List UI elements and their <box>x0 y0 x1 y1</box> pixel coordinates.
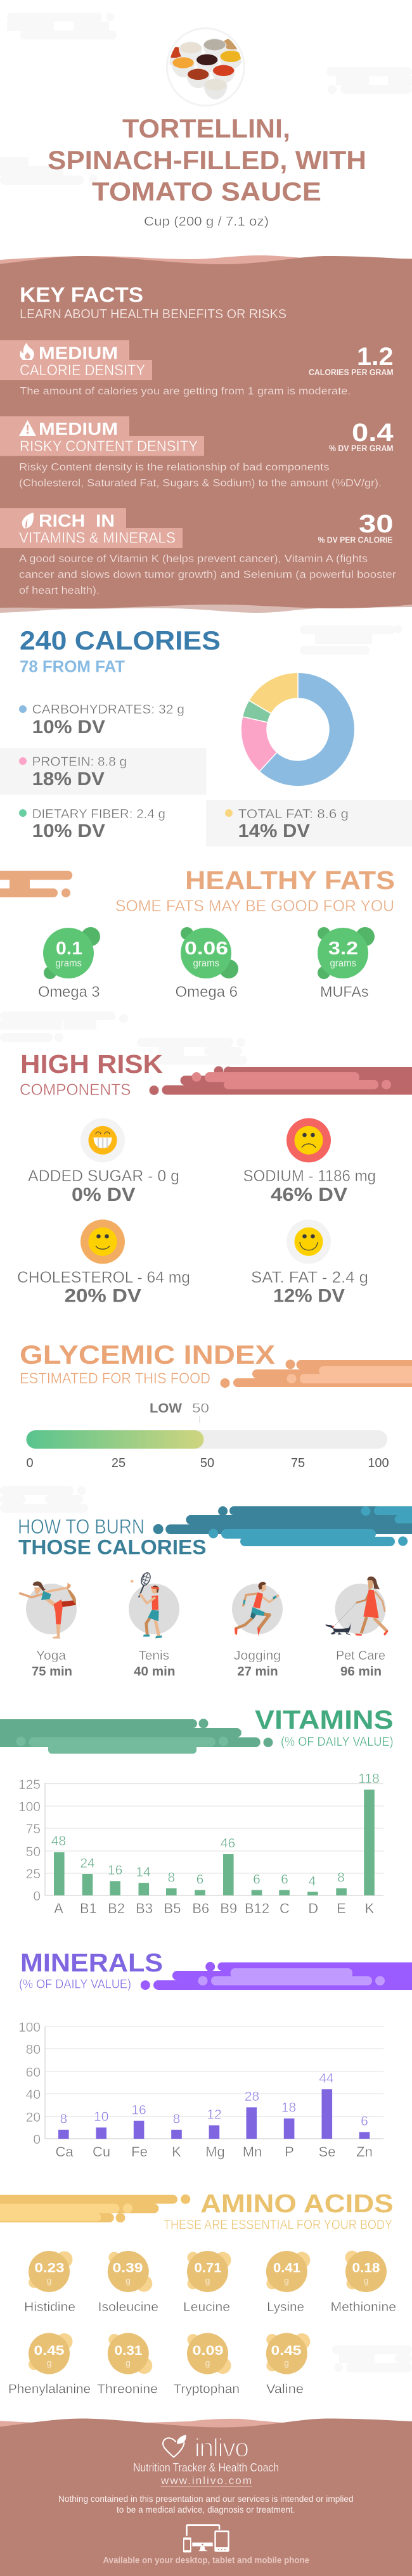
panel: amino acids <box>0 2189 396 2397</box>
unit: % DV PER GRAM <box>329 444 394 453</box>
axis labels: 0 <box>33 1889 41 1904</box>
badge: omega 3: Omega 3 <box>38 984 100 1001</box>
badge: methionine <box>331 2251 396 2314</box>
panel: high risk components <box>17 1049 412 1307</box>
icon: flame <box>20 343 34 360</box>
title <box>48 113 366 207</box>
description <box>19 461 382 489</box>
value labels: 44 <box>319 2071 334 2086</box>
category labels: B5 <box>164 1900 181 1916</box>
donut chart <box>241 672 355 786</box>
value labels <box>60 2071 368 2129</box>
decorative bar <box>141 1962 412 1990</box>
fact: calorie density <box>0 340 394 397</box>
item: added sugar: 0% DV <box>72 1184 136 1205</box>
value labels: 12 <box>207 2108 222 2122</box>
heading: AMINO ACIDS <box>200 2189 394 2218</box>
legend: dietary fiber <box>19 807 165 842</box>
category labels: B2 <box>108 1900 125 1916</box>
badge: mufas: grams <box>330 958 356 969</box>
activity: tennis <box>129 1572 179 1679</box>
reading: low 50: 50 <box>192 1401 209 1416</box>
fact: risky content density <box>0 416 394 489</box>
badge: phenylalanine <box>8 2333 91 2397</box>
heading: MINERALS <box>20 1948 163 1977</box>
badge: tryptophan: Tryptophan <box>174 2383 240 2397</box>
scale labels: 50 <box>200 1456 214 1470</box>
legend: carbohydrates <box>19 703 184 738</box>
axis labels: 125 <box>18 1778 41 1792</box>
axis labels: 50 <box>26 1845 41 1859</box>
duration: 40 min <box>134 1665 175 1679</box>
badge: histidine <box>24 2251 75 2314</box>
figure: tennis player <box>131 1572 162 1638</box>
badge: isoleucine: Isoleucine <box>98 2300 158 2314</box>
legend: total fat: 14% DV <box>238 821 310 842</box>
heading: HIGH RISK <box>20 1049 163 1079</box>
badge: threonine: Threonine <box>97 2383 158 2397</box>
item: cholesterol: 20% DV <box>65 1286 141 1307</box>
icon: heart with leaf <box>163 2435 186 2457</box>
item: saturated fat: SAT. FAT - 2.4 g <box>251 1269 368 1286</box>
background: protein row <box>0 748 207 795</box>
value labels: 28 <box>245 2089 259 2104</box>
heading <box>18 1515 207 1559</box>
value labels: 8 <box>173 2111 180 2127</box>
bar chart: vitamins <box>18 1772 383 1916</box>
unit: % DV PER CALORIE <box>318 535 392 545</box>
category labels: Se <box>319 2144 335 2160</box>
axis labels <box>18 2020 41 2147</box>
category labels: A <box>54 1900 63 1916</box>
description: The amount of calories you are getting from 1 gram is moderate. <box>20 385 351 397</box>
badge: lysine: Lysine <box>267 2300 304 2314</box>
value labels: 8 <box>167 1871 175 1885</box>
category labels: B6 <box>192 1900 209 1916</box>
description: Risky Content density is the relationship of bad components <box>19 461 330 473</box>
subheading: from fat: 78 FROM FAT <box>20 657 125 676</box>
website: www.inlivo.com <box>160 2475 252 2487</box>
axis labels: 80 <box>26 2042 41 2057</box>
description: (Cholesterol, Saturated Fat, Sugars & Sodium) to the amount (%DV/gr). <box>19 477 382 489</box>
badge: histidine: g <box>47 2276 51 2286</box>
label: RISKY CONTENT DENSITY <box>20 438 198 455</box>
title: TORTELLINI, <box>122 113 290 143</box>
subheading: COMPONENTS <box>20 1081 131 1099</box>
item: added sugar <box>28 1118 179 1205</box>
figure: woman walking dog <box>325 1577 389 1636</box>
scale labels: 25 <box>112 1456 126 1470</box>
duration: 75 min <box>32 1665 72 1679</box>
item: saturated fat <box>251 1219 368 1307</box>
label: Tenis <box>138 1649 169 1663</box>
scale labels <box>26 1456 389 1470</box>
legend: dietary fiber: 10% DV <box>32 821 105 842</box>
subheading: SOME FATS MAY BE GOOD FOR YOU <box>115 897 394 915</box>
value: 1.2 <box>357 343 394 371</box>
category labels: Zn <box>356 2144 373 2160</box>
badge: methionine: 0.18 <box>352 2261 380 2276</box>
item: saturated fat: 12% DV <box>273 1286 345 1307</box>
value labels: 48 <box>51 1834 66 1849</box>
background: total fat row <box>206 800 412 847</box>
badge: omega 6: 0.06 <box>184 939 228 959</box>
badge: lysine: g <box>284 2276 289 2286</box>
value labels: 24 <box>80 1856 95 1871</box>
category labels: B3 <box>136 1900 153 1916</box>
category labels: Mn <box>243 2144 262 2160</box>
axis labels: 20 <box>26 2110 41 2125</box>
badge: leucine: g <box>205 2276 210 2286</box>
value labels: 10 <box>94 2110 108 2124</box>
heading: GLYCEMIC INDEX <box>20 1340 275 1369</box>
badge: leucine: 0.71 <box>194 2261 222 2276</box>
panel: footer <box>0 2418 412 2576</box>
legend: protein: 18% DV <box>32 769 105 790</box>
badge: isoleucine: 0.39 <box>113 2261 143 2276</box>
badge: leucine: Leucine <box>183 2300 230 2314</box>
category labels: B12 <box>245 1900 269 1916</box>
description <box>19 553 396 596</box>
legend: carbohydrates: 10% DV <box>32 717 105 738</box>
heading: HEALTHY FATS <box>185 866 395 895</box>
item: cholesterol: CHOLESTEROL - 64 mg <box>17 1269 190 1286</box>
axis labels: 25 <box>26 1867 41 1881</box>
item: sodium: 46% DV <box>271 1184 347 1205</box>
decorative bar <box>0 1719 273 1754</box>
disclaimer: to be a medical advice, diagnosis or treatment. <box>117 2504 295 2515</box>
value labels: 6 <box>361 2114 368 2129</box>
title: TOMATO SAUCE <box>92 176 321 207</box>
badge: lysine <box>266 2251 310 2314</box>
activity: yoga <box>20 1581 77 1679</box>
legend: total fat: TOTAL FAT: 8.6 g <box>238 807 349 821</box>
category labels: K <box>172 2144 181 2160</box>
badge: phenylalanine: Phenylalanine <box>8 2383 91 2397</box>
badge: histidine: Histidine <box>24 2300 75 2314</box>
legend: protein: PROTEIN: 8.8 g <box>32 755 127 769</box>
decorative bar <box>153 1506 412 1546</box>
heading: THOSE CALORIES <box>18 1536 207 1559</box>
label: Jogging <box>234 1649 281 1663</box>
duration: 96 min <box>340 1665 382 1679</box>
badge: omega 3: 0.1 <box>56 939 82 959</box>
value labels: 46 <box>221 1836 235 1850</box>
value labels: 8 <box>337 1871 345 1885</box>
item: sodium: SODIUM - 1186 mg <box>243 1167 376 1185</box>
subheading: (% OF DAILY VALUE) <box>19 1977 131 1991</box>
category labels: B1 <box>80 1900 97 1916</box>
wordmark: inlivo <box>195 2433 249 2463</box>
badge: valine: Valine <box>266 2383 304 2397</box>
value labels <box>51 1772 380 1888</box>
legend: protein <box>19 755 127 790</box>
category labels: K <box>365 1900 375 1916</box>
serving size: Cup (200 g / 7.1 oz) <box>144 215 269 229</box>
value labels: 16 <box>131 2103 146 2118</box>
category labels: Fe <box>131 2144 148 2160</box>
badge: methionine: g <box>364 2276 368 2286</box>
item: cholesterol <box>17 1219 190 1307</box>
label: VITAMINS & MINERALS <box>19 530 176 546</box>
bar chart: minerals <box>18 2020 383 2160</box>
description: A good source of Vitamin K (helps prevent cancer), Vitamin A (fights <box>19 553 368 565</box>
item: sodium <box>243 1118 376 1205</box>
value labels: 6 <box>253 1872 261 1887</box>
panel: key facts <box>0 255 412 613</box>
bars <box>58 2089 370 2139</box>
heading: key facts: KEY FACTS <box>20 283 143 307</box>
heading: HOW TO BURN <box>18 1515 145 1538</box>
legend: carbohydrates: CARBOHYDRATES: 32 g <box>32 703 184 717</box>
category labels: Mg <box>205 2144 225 2160</box>
scale labels: 100 <box>368 1456 389 1470</box>
decorative bar <box>150 1066 412 1095</box>
badge: mufas: 3.2 <box>328 939 358 959</box>
value: 0.4 <box>352 419 394 447</box>
badge: omega 6: grams <box>193 958 219 969</box>
logo: inlivo <box>163 2433 249 2463</box>
category labels: C <box>280 1900 290 1916</box>
subheading: ESTIMATED FOR THIS FOOD <box>20 1370 210 1387</box>
badge: isoleucine <box>98 2251 158 2314</box>
icon: leaf <box>22 513 34 529</box>
rating: MEDIUM <box>39 343 118 362</box>
duration: 27 min <box>237 1665 278 1679</box>
category labels: Cu <box>93 2144 110 2160</box>
value labels: 18 <box>281 2100 296 2115</box>
badge: threonine: 0.31 <box>114 2343 143 2358</box>
badge: methionine: Methionine <box>331 2300 396 2314</box>
value labels: 8 <box>60 2111 67 2127</box>
value labels: 16 <box>108 1863 122 1878</box>
activity: pet care <box>325 1577 389 1679</box>
subheading: LEARN ABOUT HEALTH BENEFITS OR RISKS <box>20 307 286 321</box>
badge: valine: 0.45 <box>271 2343 302 2358</box>
badge: mufas: MUFAs <box>320 984 369 1001</box>
axis labels: 0 <box>33 2132 41 2147</box>
panel: how to burn those calories <box>18 1506 412 1679</box>
icon: desktop, tablet and phone <box>183 2524 229 2553</box>
category labels <box>55 2144 373 2160</box>
figure: jogger <box>235 1582 279 1636</box>
rating: RICH IN <box>39 511 115 530</box>
value labels: 6 <box>281 1872 288 1887</box>
figure: yoga pose <box>20 1581 76 1639</box>
legend: total fat <box>225 807 349 842</box>
label: CALORIE DENSITY <box>20 362 145 379</box>
category labels: P <box>285 2144 294 2160</box>
title: SPINACH-FILLED, WITH <box>48 145 366 175</box>
disclaimer <box>58 2494 354 2515</box>
badge: valine <box>266 2333 310 2397</box>
panel: calories <box>0 625 412 847</box>
badge: tryptophan: 0.09 <box>193 2343 223 2358</box>
category labels: B9 <box>220 1900 237 1916</box>
decorative bar <box>221 1360 412 1388</box>
heading: VITAMINS <box>255 1705 394 1734</box>
category labels: E <box>337 1900 346 1916</box>
reading: low 50 <box>150 1401 209 1416</box>
disclaimer: Nothing contained in this presentation and our services is intended or implied <box>58 2494 354 2504</box>
description: of heart health). <box>19 584 100 596</box>
axis labels: 100 <box>18 2020 41 2035</box>
category labels: Ca <box>55 2144 74 2160</box>
badge: histidine: 0.23 <box>34 2261 65 2276</box>
axis labels <box>18 1778 41 1904</box>
badge: omega 3 <box>38 927 100 1001</box>
legend: dietary fiber: DIETARY FIBER: 2.4 g <box>32 807 165 821</box>
badge: valine: g <box>284 2358 289 2368</box>
panel: vitamins <box>0 1705 394 1916</box>
category labels: D <box>308 1900 318 1916</box>
heading: 240 calories: 240 CALORIES <box>20 625 221 655</box>
badge: phenylalanine: 0.45 <box>34 2343 65 2358</box>
rating: MEDIUM <box>39 419 118 439</box>
axis labels: 75 <box>26 1822 41 1836</box>
badge: tryptophan <box>174 2333 240 2397</box>
gauge <box>26 1401 389 1470</box>
badge: leucine <box>183 2251 231 2314</box>
panel: healthy fats <box>0 866 395 1001</box>
badge: isoleucine: g <box>126 2276 131 2286</box>
axis labels: 40 <box>26 2087 41 2102</box>
decorative bar <box>0 2195 190 2222</box>
food photo: bowls of sauce in a ring <box>162 29 245 106</box>
badge: tryptophan: g <box>205 2358 210 2368</box>
label: Pet Care <box>336 1649 385 1663</box>
value labels: 6 <box>196 1872 203 1887</box>
icon: warning triangle <box>19 420 36 436</box>
badge: lysine: 0.41 <box>273 2261 300 2276</box>
decorative bar <box>0 871 72 897</box>
badge: threonine: g <box>126 2358 131 2368</box>
activity: jogging <box>232 1582 283 1679</box>
axis labels: 60 <box>26 2065 41 2080</box>
tagline: Nutrition Tracker & Health Coach <box>133 2461 279 2474</box>
description: cancer and slows down tumor growth) and Selenium (a powerful booster <box>19 568 396 580</box>
scale labels: 75 <box>291 1456 305 1470</box>
value labels: 4 <box>309 1874 316 1888</box>
value labels: 118 <box>358 1772 380 1786</box>
badge: omega 6: Omega 6 <box>175 984 238 1001</box>
subheading: (% OF DAILY VALUE) <box>281 1735 394 1749</box>
badge: omega 6 <box>175 927 238 1001</box>
item: added sugar: ADDED SUGAR - 0 g <box>28 1167 179 1185</box>
badge: threonine <box>97 2333 158 2397</box>
badge: mufas <box>318 927 375 1001</box>
fact: rich in vitamins and minerals <box>0 508 396 596</box>
unit: CALORIES PER GRAM <box>309 368 394 377</box>
panel: minerals <box>18 1948 412 2160</box>
scale labels: 0 <box>26 1456 34 1470</box>
value: 30 <box>359 510 394 538</box>
reading: low 50: LOW <box>150 1401 182 1416</box>
category labels <box>54 1900 375 1916</box>
axis labels: 100 <box>18 1800 41 1814</box>
badge: omega 3: grams <box>56 958 82 969</box>
availability note: Available on your desktop, tablet and mobile phone <box>103 2555 309 2565</box>
badge: phenylalanine: g <box>47 2358 51 2368</box>
value labels: 14 <box>136 1865 151 1880</box>
bars <box>54 1790 375 1895</box>
label: Yoga <box>36 1649 67 1663</box>
panel: glycemic index <box>20 1340 412 1470</box>
